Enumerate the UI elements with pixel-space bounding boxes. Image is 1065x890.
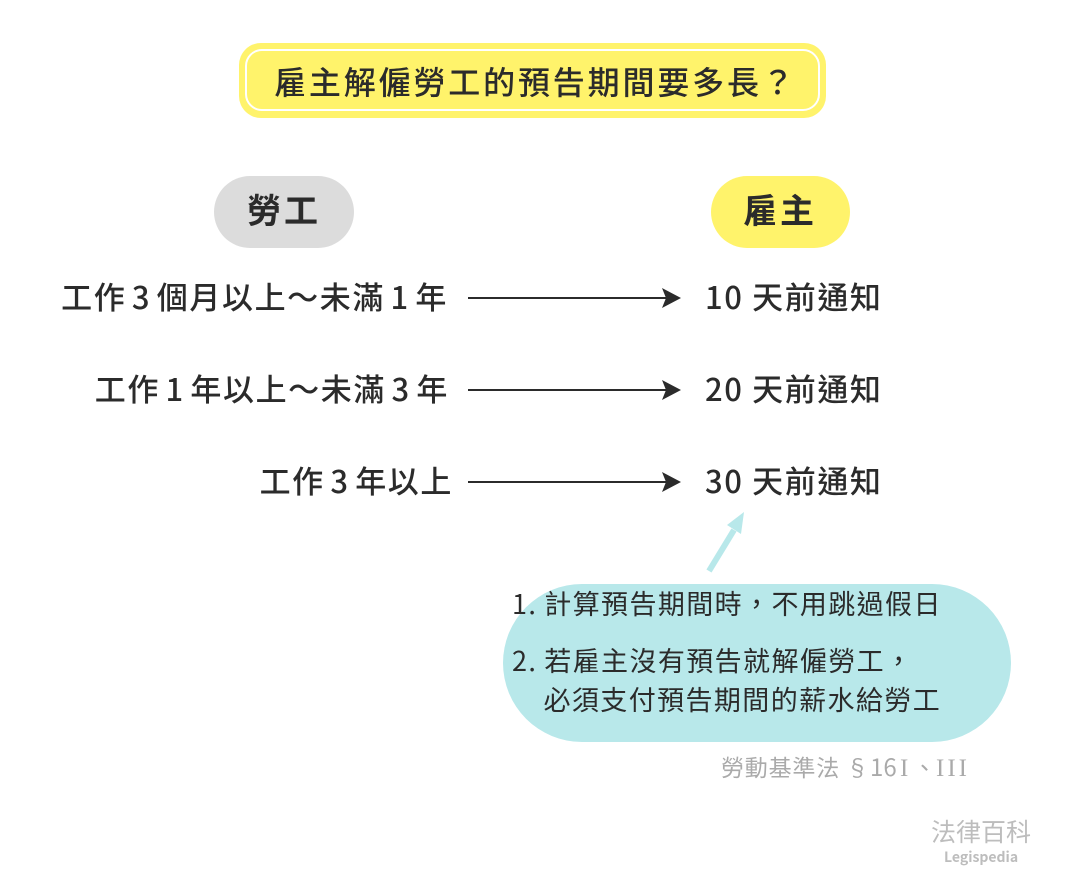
legal citation: 16	[870, 748, 897, 783]
arrow: note pointing up to row 3	[709, 512, 744, 571]
row 1: 3 months to 1 year	[61, 273, 883, 318]
row 1: 3 months to 1 year: 10 天前通知	[705, 273, 883, 318]
arrow: row 2	[468, 380, 681, 400]
title banner: 雇主解僱勞工的預告期間要多長？	[274, 58, 797, 104]
legal citation: 勞動基準法	[721, 749, 840, 783]
arrow: row 3	[468, 472, 681, 492]
row 1: 3 months to 1 year: 工作 3 個月以上～未滿 1 年	[61, 273, 448, 318]
note 2: 2. 若雇主沒有預告就解僱勞工，	[512, 640, 913, 679]
legal citation: III	[936, 755, 970, 782]
note 2	[512, 640, 941, 718]
legal citation: I	[900, 755, 908, 782]
note 1: 1. 計算預告期間時，不用跳過假日	[512, 583, 942, 622]
row 2: 1 year to 3 years: 20 天前通知	[705, 365, 883, 410]
column header: worker: 勞工	[247, 184, 321, 233]
logo: Legispedia: Legispedia	[944, 847, 1018, 867]
note 2: 必須支付預告期間的薪水給勞工	[544, 679, 941, 718]
title banner	[239, 43, 826, 118]
row 3: over 3 years: 30 天前通知	[705, 457, 883, 502]
row 2: 1 year to 3 years	[95, 365, 883, 410]
legal citation	[721, 748, 970, 783]
legal citation: §	[846, 749, 869, 783]
row 2: 1 year to 3 years: 工作 1 年以上～未滿 3 年	[95, 365, 449, 410]
column header: worker	[214, 176, 354, 248]
column header: employer	[711, 176, 850, 248]
logo: Legispedia	[931, 813, 1031, 867]
row 3: over 3 years	[260, 457, 883, 502]
legal citation: 、	[913, 749, 936, 783]
column header: employer: 雇主	[743, 184, 817, 233]
logo: Legispedia: 法律百科	[931, 813, 1031, 849]
callout: notes	[503, 583, 1011, 742]
row 3: over 3 years: 工作 3 年以上	[260, 457, 453, 502]
arrow: row 1	[468, 288, 681, 308]
